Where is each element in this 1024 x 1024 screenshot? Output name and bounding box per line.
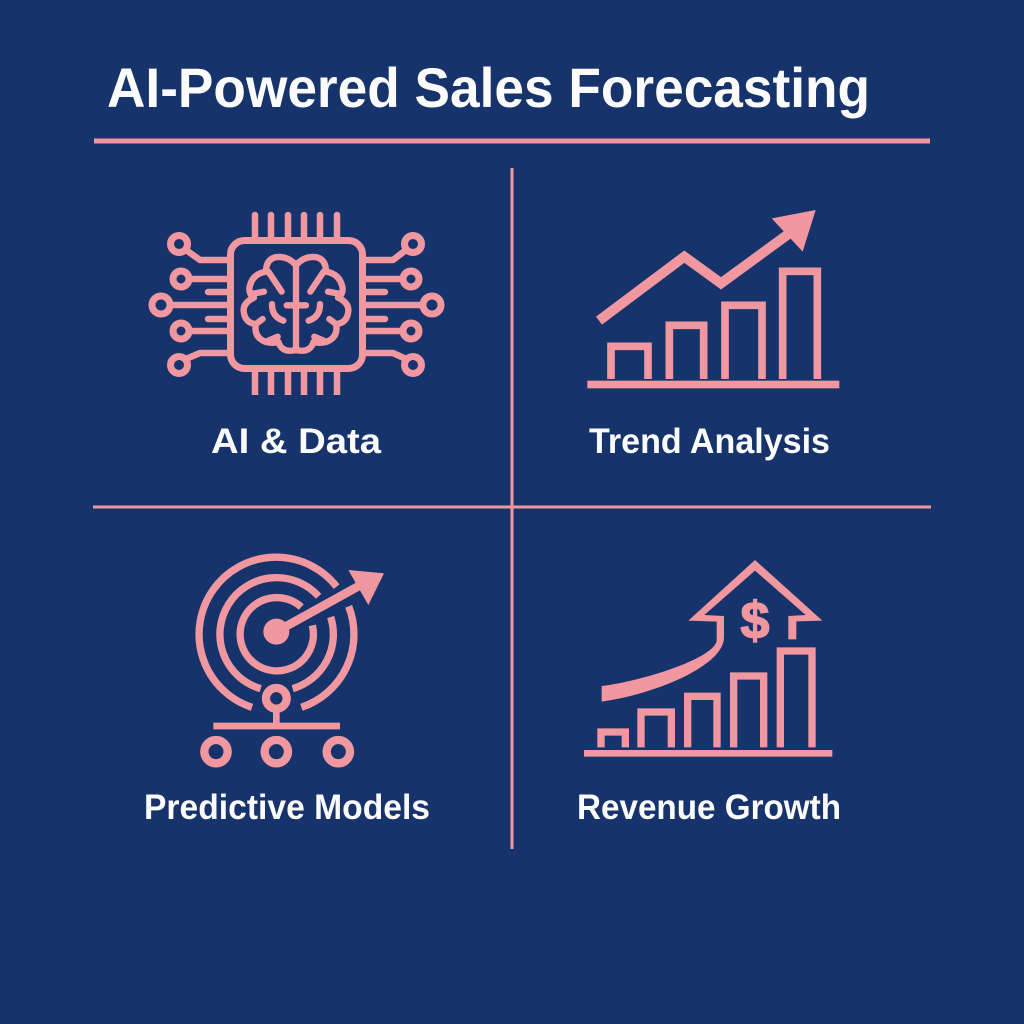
panel: AI & Data [152,215,441,461]
label: Trend Analysis: Trend Analysis [589,422,830,461]
label: AI & Data: AI & Data [211,422,382,461]
icon: revenue growth chart with dollar arrow [584,560,832,757]
panel: Revenue Growth [577,560,841,827]
title: AI-Powered Sales Forecasting [107,56,870,119]
icon: trend chart with arrow [587,210,839,388]
panel: Predictive Models [144,557,430,827]
label: Predictive Models: Predictive Models [144,788,430,827]
icon: dollar sign: $ [741,592,770,650]
panel: Trend Analysis [587,210,839,461]
icon: target with arrow and model nodes [199,557,384,763]
label: Revenue Growth: Revenue Growth [577,788,841,827]
icon: AI chip with brain [152,215,441,395]
